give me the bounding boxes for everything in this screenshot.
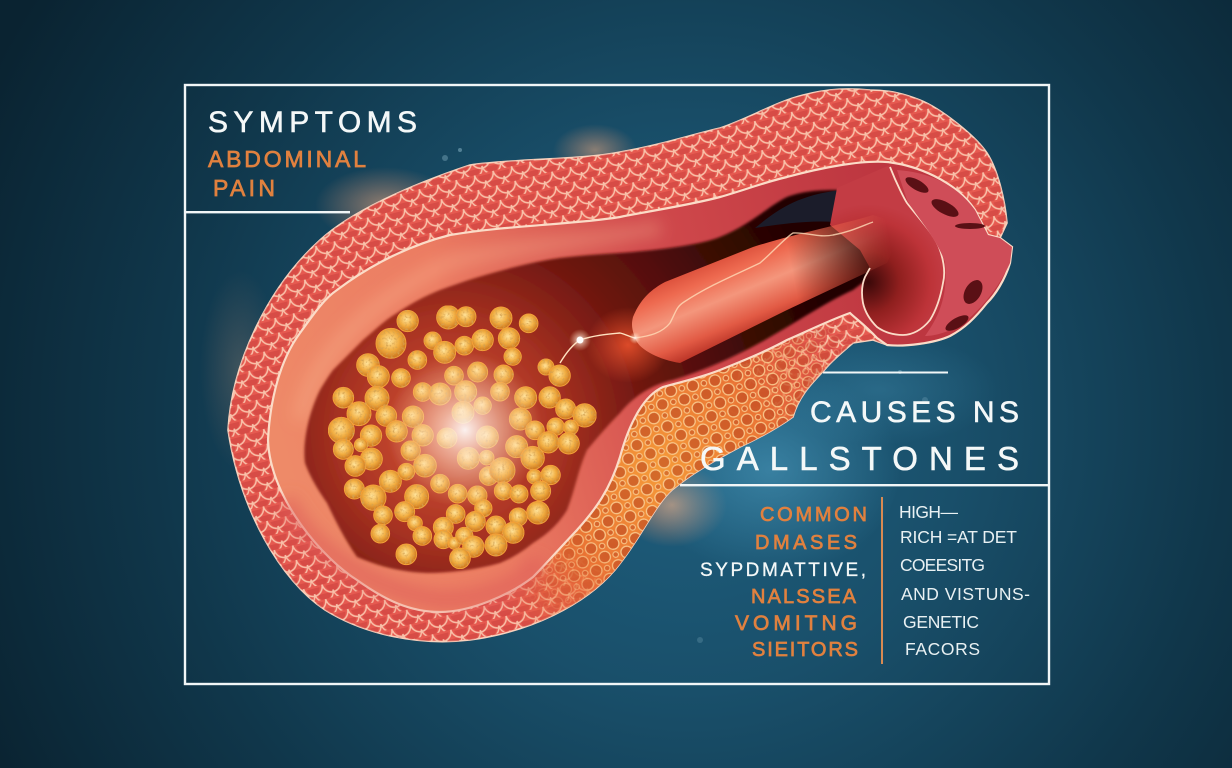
text block: common diseases: COMMON <box>760 504 867 526</box>
frame: outer border <box>185 85 1049 684</box>
outer textured band <box>227 88 1013 642</box>
bile duct tube <box>632 215 905 363</box>
glow behind organ <box>200 124 1000 643</box>
text block: common diseases: VOMITNG <box>735 612 857 635</box>
inner smooth wall <box>268 162 1012 612</box>
lumen cavity <box>304 190 885 573</box>
dark gap above tube <box>755 190 842 228</box>
text block: risk factors: COEESITG <box>900 555 985 575</box>
symptom: abdominal pain: ABDOMINAL <box>208 146 366 172</box>
symptoms heading: SYMPTOMS <box>208 106 417 139</box>
wall highlight <box>300 228 660 420</box>
spark <box>569 329 641 351</box>
text block: common diseases: DMASES <box>755 532 857 554</box>
duct loop outline <box>862 167 944 335</box>
spark wire <box>560 333 635 363</box>
wall curving into loop <box>830 165 944 335</box>
text block: common diseases: NALSSEA <box>751 586 857 608</box>
text block: common diseases: SYPDMATTIVE, <box>700 560 866 581</box>
frame: symptoms divider <box>185 211 350 213</box>
text block: risk factors <box>899 502 1030 659</box>
wall lower pink shading <box>285 500 540 600</box>
right chamber <box>897 170 1012 336</box>
text block: common diseases <box>700 504 867 661</box>
central light glow <box>387 352 543 508</box>
frame: gallstones divider <box>680 484 1049 486</box>
causes heading: CAUSES NS <box>810 396 1019 429</box>
frame: short rule above causes <box>823 372 948 374</box>
duct nerve line <box>635 222 873 338</box>
warm glow beside duct tip <box>586 307 670 383</box>
text block: common diseases: SIEITORS <box>752 639 858 661</box>
text block: risk factors: GENETIC <box>903 612 979 632</box>
symptom: abdominal pain: PAIN <box>213 175 275 201</box>
gallbladder illustration <box>227 88 1014 642</box>
text block: risk factors: FACORS <box>905 639 980 659</box>
text block: risk factors: AND VISTUNS- <box>901 584 1030 604</box>
text block: risk factors: HIGH— <box>899 502 958 522</box>
orange column divider <box>881 497 883 664</box>
causes heading <box>700 396 1019 477</box>
symptom: abdominal pain <box>208 146 366 201</box>
gallstones cluster <box>328 306 596 569</box>
text block: risk factors: RICH =AT DET <box>900 527 1017 547</box>
causes heading: GALLSTONES <box>700 440 1019 477</box>
chamber cavities <box>903 174 986 334</box>
